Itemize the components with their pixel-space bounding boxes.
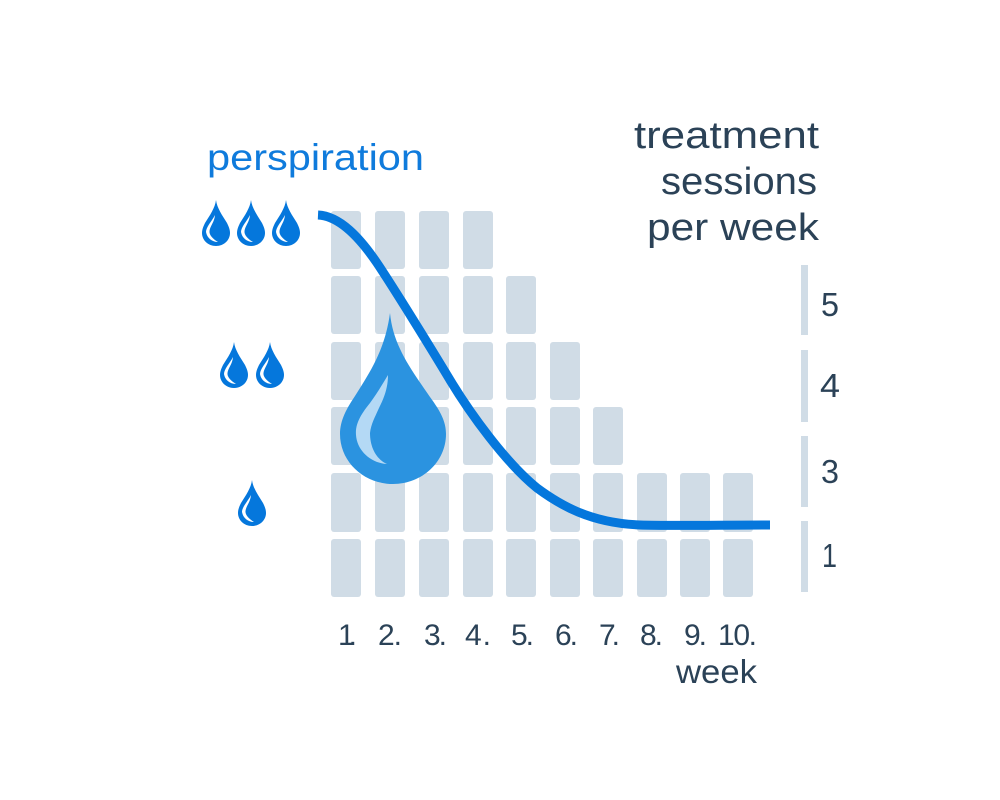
axis labels: weeks: 5. bbox=[511, 619, 534, 652]
line: perspiration decline curve bbox=[318, 215, 770, 525]
axis labels: weeks: 1. bbox=[338, 619, 357, 652]
axis labels: weeks: 8. bbox=[640, 619, 663, 652]
icon: one drop, low perspiration bbox=[238, 480, 266, 526]
axis labels: weeks: 7. bbox=[599, 619, 620, 652]
axis labels: weeks: 2. bbox=[378, 619, 402, 652]
axis labels: weeks: 4. bbox=[465, 619, 491, 652]
heading: treatment sessions per week: treatment bbox=[634, 115, 819, 157]
scale bars: sessions per week bbox=[801, 265, 808, 592]
scale labels: sessions per week: 4 bbox=[820, 367, 840, 404]
scale labels: sessions per week bbox=[820, 286, 840, 574]
icon: large water drop bbox=[340, 313, 446, 484]
heading: perspiration: perspiration bbox=[207, 137, 424, 178]
bar chart: weekly session blocks bbox=[331, 211, 753, 597]
axis labels: weeks: 3. bbox=[424, 619, 447, 652]
axis labels: weeks bbox=[338, 619, 757, 652]
heading: treatment sessions per week bbox=[634, 115, 820, 249]
heading: treatment sessions per week: per week bbox=[647, 207, 820, 249]
scale labels: sessions per week: 1 bbox=[822, 537, 837, 574]
axis labels: weeks: 6. bbox=[555, 619, 578, 652]
icon: three drops, high perspiration bbox=[202, 200, 300, 246]
axis labels: weeks: 10. bbox=[718, 619, 757, 652]
scale labels: sessions per week: 3 bbox=[821, 453, 839, 490]
heading: treatment sessions per week: sessions bbox=[661, 161, 817, 203]
icon: two drops, medium perspiration bbox=[220, 342, 284, 388]
axis title: week: week bbox=[675, 653, 758, 690]
scale labels: sessions per week: 5 bbox=[821, 286, 839, 323]
axis labels: weeks: 9. bbox=[684, 619, 707, 652]
